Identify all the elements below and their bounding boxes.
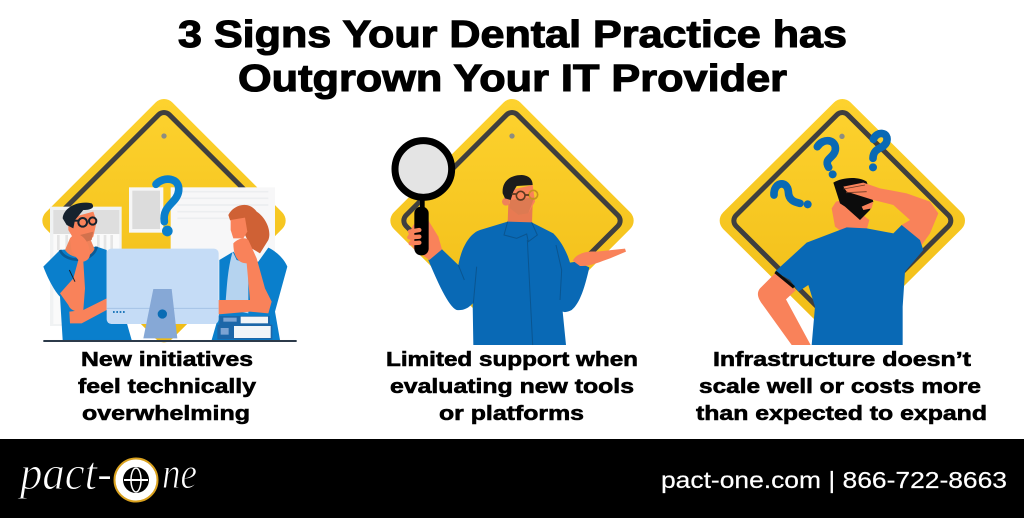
computer monitor [107, 249, 219, 338]
caption: infrastructure: than expected to expand [696, 402, 987, 425]
desk line [43, 340, 297, 342]
caption: infrastructure [696, 348, 987, 425]
icon: question marks [774, 133, 887, 208]
icon: question mark [156, 179, 179, 236]
caption: new initiatives [78, 348, 257, 425]
caption: infrastructure: scale well or costs more [699, 375, 981, 398]
logo: pact-one [17, 447, 197, 502]
title: Outgrown Your IT Provider [238, 58, 787, 100]
caption: new initiatives: overwhelming [82, 402, 250, 425]
man scratching head [758, 178, 938, 345]
title: 3 Signs Your Dental Practice has [178, 14, 847, 56]
man with shrug [428, 175, 626, 345]
contact details: pact-one.com | 866-722-8663 [661, 467, 1007, 493]
caption: new initiatives: New initiatives [81, 348, 253, 371]
panel: new initiatives illustration [43, 111, 297, 342]
caption: limited support: evaluating new tools [390, 375, 634, 398]
icon: warning sign [54, 111, 274, 331]
title [178, 14, 847, 100]
caption: limited support: Limited support when [386, 348, 638, 371]
icon: magnifying glass in hand [395, 141, 452, 260]
logo: pact-one: ne [162, 449, 197, 498]
woman thinking [212, 205, 287, 340]
middle card [129, 187, 163, 233]
caption: limited support [386, 348, 638, 425]
caption: infrastructure: Infrastructure doesn’t [713, 348, 971, 371]
caption: limited support: or platforms [439, 402, 584, 425]
books [217, 316, 272, 339]
icon: warning sign [402, 111, 622, 331]
footer bar [0, 439, 1024, 518]
left paper [50, 207, 122, 326]
logo: pact-one: pact- [17, 447, 112, 500]
panel: limited support illustration [395, 111, 626, 345]
man thinking [43, 203, 132, 340]
right paper [171, 187, 275, 324]
caption: new initiatives: feel technically [78, 375, 257, 398]
icon: warning sign [731, 111, 953, 331]
panel: infrastructure illustration [731, 111, 953, 345]
